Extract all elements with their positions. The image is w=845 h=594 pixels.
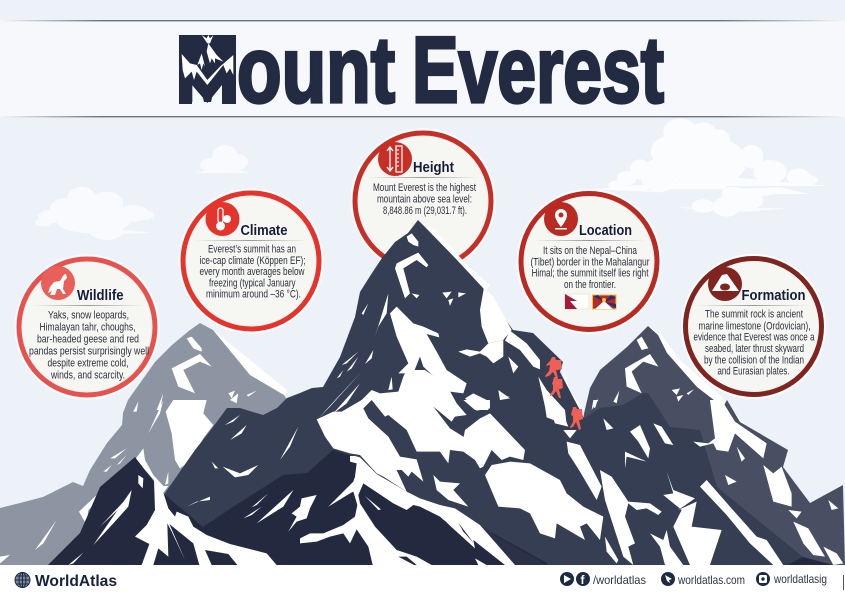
social: facebook handle: /worldatlas [593, 573, 646, 587]
text: formation: by the collision of the Indian [704, 354, 804, 366]
text: wildlife: Himalayan tahr, choughs, [40, 322, 136, 334]
mountain: foreground dark ridge [48, 450, 547, 565]
text: location: Himal; the summit itself lies right [532, 268, 648, 280]
panel: location [516, 189, 662, 334]
panel: wildlife [14, 254, 160, 400]
cloud: right [593, 118, 828, 217]
icon: climber upper [545, 357, 562, 378]
heading: height: Height [413, 160, 454, 176]
text: location: (Tibet) border in the Mahalangur [530, 256, 650, 268]
text: climate: Everest’s summit has an [208, 244, 296, 256]
icon: flag of Nepal [565, 294, 589, 309]
icon: climber lower [570, 407, 583, 430]
icon: website cursor [661, 572, 675, 586]
social: instagram: worldatlasig [773, 572, 827, 586]
cloud: centre left [195, 145, 250, 173]
text: wildlife [29, 310, 149, 382]
heading: location: Location [579, 223, 632, 239]
icon: climbers [545, 357, 583, 430]
title: M [179, 17, 236, 122]
cloud: left [35, 187, 154, 240]
title: ount [237, 17, 395, 122]
text: wildlife: bar-headed geese and red [37, 334, 139, 346]
text: formation: marine limestone (Ordovician), [698, 320, 810, 332]
mountain: back left grey [0, 323, 300, 565]
icon: mountain M logo [179, 35, 236, 104]
panel: height [350, 128, 496, 274]
text: height: mountain above sea level: [377, 194, 472, 206]
text: wildlife: Yaks, snow leopards, [48, 310, 129, 322]
panel: formation [681, 254, 826, 399]
text: formation: seabed, later thrust skyward [705, 343, 804, 355]
text: location: It sits on the Nepal–China [543, 245, 638, 257]
text: height: Mount Everest is the highest [373, 182, 476, 194]
panel: climate [178, 188, 324, 334]
icon: flag of Tibet [592, 295, 616, 309]
text: climate [200, 244, 306, 300]
icon: map pin [544, 202, 578, 236]
heading: formation: Formation [742, 288, 806, 304]
icon: rock formation [708, 267, 742, 301]
text: climate: minimum around –36 °C). [206, 288, 301, 300]
title: Everest [412, 17, 664, 122]
icon: thermometer [206, 202, 240, 236]
icon: mountain goat [41, 266, 75, 300]
text: location: on the frontier. [564, 279, 616, 291]
text: formation: The summit rock is ancient [705, 309, 803, 321]
icon: instagram [756, 572, 770, 586]
title [179, 17, 664, 122]
mountain: main massif [48, 220, 833, 565]
brand name: WorldAtlas [35, 573, 117, 590]
icon: climber middle [550, 377, 563, 398]
text: wildlife: pandas persist surprisingly well [29, 346, 149, 358]
text: wildlife: winds, and scarcity. [50, 370, 125, 382]
icon: globe [15, 572, 30, 588]
text: wildlife: despite extreme cold, [48, 358, 128, 370]
text: climate: ice-cap climate (Köppen EF); [200, 255, 306, 267]
text: climate: every month averages below [200, 266, 305, 278]
mountain: right peak [583, 326, 845, 565]
heading: climate: Climate [240, 223, 288, 239]
social: website: worldatlas.com [677, 573, 745, 587]
text: formation: and Eurasian plates. [718, 366, 790, 378]
footer [0, 565, 845, 594]
icon: video [560, 572, 574, 586]
heading: wildlife: Wildlife [77, 288, 124, 304]
snow: main massif [68, 233, 843, 565]
icon: facebook [576, 572, 590, 587]
text: height: 8,848.86 m (29,031.7 ft). [383, 205, 467, 217]
text: height [373, 182, 476, 217]
text: location [530, 245, 650, 291]
icon: height ruler [378, 142, 412, 176]
text: climate: freezing (typical January [209, 277, 296, 289]
icon: facebook: f [580, 573, 586, 587]
text: formation [694, 309, 815, 378]
